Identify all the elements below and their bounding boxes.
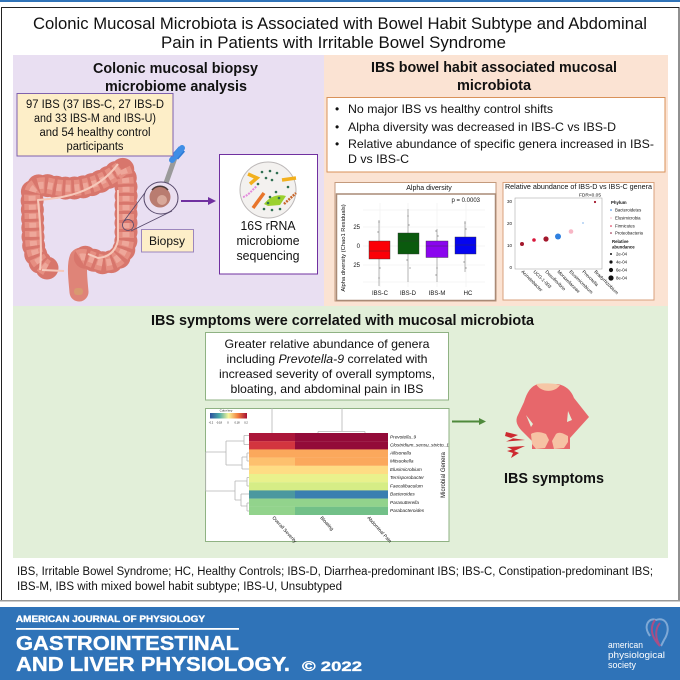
chart: alpha diversity box plot: IBS-D bbox=[400, 291, 417, 297]
chart: relative abundance scatter: 0 bbox=[509, 265, 512, 270]
text box: prevotella correlation: Greater relative abundance of genera bbox=[224, 337, 430, 351]
text box: prevotella correlation: including Prevotella-9 correlated with bbox=[226, 352, 428, 366]
heading: symptoms: IBS symptoms were correlated with mucosal microbiota bbox=[151, 313, 535, 329]
journal name: GASTROINTESTINAL bbox=[16, 633, 239, 655]
chart: alpha diversity box plot: 25 bbox=[353, 263, 361, 269]
text box: prevotella correlation: increased severity of overall symptoms, bbox=[219, 367, 435, 381]
banner: journal footer bbox=[0, 607, 680, 680]
chart: relative abundance scatter: 4e-04 bbox=[616, 260, 628, 264]
legend: colour key: -0.18 bbox=[216, 420, 223, 424]
journal name: AMERICAN JOURNAL OF PHYSIOLOGY bbox=[16, 614, 206, 625]
box: 16S rRNA sequencing bbox=[220, 154, 318, 274]
text box: bowel habit findings: D vs IBS-C bbox=[348, 152, 409, 166]
heading: bowel habit: microbiota bbox=[457, 78, 532, 94]
chart: relative abundance scatter: Bacteroidetes bbox=[615, 208, 641, 212]
chart: relative abundance scatter: Relative abundance of IBS-D vs IBS-C genera bbox=[505, 182, 653, 191]
chart: relative abundance scatter: Prevotella bbox=[581, 269, 600, 287]
chart: relative abundance scatter: 10 bbox=[507, 243, 512, 248]
legend: colour key bbox=[209, 408, 248, 424]
chart: alpha diversity box plot: IBS-M bbox=[429, 291, 445, 297]
chart: relative abundance scatter bbox=[503, 182, 654, 300]
logo: American Physiological Society: physiological bbox=[608, 650, 665, 661]
journal name: AND LIVER PHYSIOLOGY. bbox=[16, 654, 290, 676]
text box: participants: and 54 healthy control bbox=[40, 127, 150, 139]
text box: prevotella correlation: bloating, and abdominal pain in IBS bbox=[230, 382, 424, 396]
chart: genera heatmap: Overall Severity bbox=[271, 515, 298, 545]
label: biopsy bbox=[142, 230, 194, 252]
chart: relative abundance scatter: Phylum bbox=[611, 200, 627, 205]
panel: IBS symptoms correlated with mucosal microbiota bbox=[13, 306, 668, 558]
text box: bowel habit findings: Relative abundance of specific genera increased in IBS- bbox=[348, 137, 654, 151]
chart: relative abundance scatter: Relative bbox=[612, 239, 629, 244]
chart: genera heatmap: Elusimicrobium bbox=[390, 467, 422, 472]
heading: bowel habit: IBS bowel habit associated mucosal bbox=[371, 60, 617, 76]
chart: relative abundance scatter: Acinetobacter bbox=[520, 269, 544, 293]
chart: relative abundance scatter: 20 bbox=[507, 221, 512, 226]
arrow: biopsy to sequencing bbox=[181, 197, 216, 205]
heading: biopsy analysis: Colonic mucosal biopsy bbox=[93, 61, 258, 77]
legend: colour key: -0.2 bbox=[209, 420, 214, 424]
title bbox=[33, 14, 647, 52]
chart: relative abundance scatter: Elusimicrobia bbox=[615, 216, 641, 220]
journal name bbox=[16, 614, 362, 676]
chart: relative abundance scatter: Firmicutes bbox=[615, 224, 635, 228]
abbreviations footnote bbox=[17, 566, 653, 593]
title: Pain in Patients with Irritable Bowel Syndrome bbox=[161, 33, 506, 52]
chart: relative abundance scatter: 6e-04 bbox=[616, 268, 628, 272]
chart: relative abundance scatter: UCG-1-003 bbox=[532, 269, 553, 290]
label: IBS symptoms: IBS symptoms bbox=[504, 471, 604, 487]
legend: colour key: 0.2 bbox=[244, 420, 248, 424]
box: 16S rRNA sequencing: 16S rRNA bbox=[240, 219, 296, 233]
text box: bowel habit findings: • bbox=[335, 120, 339, 134]
chart: genera heatmap bbox=[206, 408, 449, 545]
chart: genera heatmap: Allisonella bbox=[389, 450, 411, 456]
journal name: © 2022 bbox=[302, 658, 362, 674]
legend: colour key: Color key bbox=[220, 408, 233, 412]
chart: relative abundance scatter: FDR<0.05 bbox=[579, 192, 601, 198]
text box: participants: participants bbox=[66, 141, 124, 153]
text box: participants: 97 IBS (37 IBS-C, 27 IBS-D bbox=[26, 99, 164, 111]
chart: relative abundance scatter: 8e-04 bbox=[616, 276, 628, 280]
chart: genera heatmap: Bloating bbox=[319, 515, 335, 532]
text box: participants bbox=[17, 94, 173, 156]
chart: alpha diversity box plot: IBS-C bbox=[372, 291, 389, 297]
box: 16S rRNA sequencing: sequencing bbox=[236, 249, 300, 263]
chart: genera heatmap: Abdominal Pain bbox=[366, 515, 393, 545]
chart: relative abundance scatter: Bradyrhizobium bbox=[593, 269, 620, 295]
abbreviations footnote: IBS, Irritable Bowel Syndrome; HC, Healthy Controls; IBS-D, Diarrhea-predominant IBS; IBS-C, Constipation-predominant IBS; bbox=[17, 566, 653, 578]
chart: genera heatmap: Parasutterella bbox=[390, 500, 419, 505]
legend: colour key: 0 bbox=[227, 420, 229, 424]
title: Colonic Mucosal Microbiota is Associated with Bowel Habit Subtype and Abdominal bbox=[33, 14, 647, 33]
icon: person with abdominal pain bbox=[505, 383, 589, 458]
legend: colour key: 0.18 bbox=[234, 420, 240, 424]
chart: relative abundance scatter: Desulfovibrio bbox=[544, 269, 567, 292]
text box: bowel habit findings: • bbox=[335, 137, 339, 151]
logo: American Physiological Society: american bbox=[608, 640, 643, 651]
chart: genera heatmap: Microbial Genera bbox=[441, 451, 447, 498]
chart: relative abundance scatter: abundance bbox=[612, 244, 635, 250]
icon: microbes bbox=[240, 162, 296, 218]
chart: genera heatmap: Faecalibaculum bbox=[390, 483, 423, 488]
chart: genera heatmap: Mitsuokella bbox=[390, 459, 414, 464]
chart: genera heatmap: Prevotella_9 bbox=[390, 434, 416, 440]
text box: bowel habit findings bbox=[327, 98, 665, 172]
icon: colon bbox=[32, 164, 126, 295]
chart: genera heatmap: Bacteroides bbox=[390, 492, 415, 497]
label: biopsy: Biopsy bbox=[149, 234, 185, 248]
logo: American Physiological Society: society bbox=[608, 660, 636, 671]
chart: genera heatmap: Parabacteroides bbox=[390, 508, 425, 513]
chart: alpha diversity box plot: Alpha diversity (Chao1 Residuals) bbox=[341, 204, 347, 292]
logo: American Physiological Society bbox=[608, 619, 668, 671]
chart: alpha diversity box plot: Alpha diversity bbox=[406, 185, 452, 192]
chart: relative abundance scatter: Moraxellaceae bbox=[556, 269, 581, 294]
text box: prevotella correlation bbox=[206, 332, 448, 400]
text box: bowel habit findings: • bbox=[335, 102, 339, 116]
heading: biopsy analysis bbox=[93, 61, 258, 95]
panel: colonic mucosal biopsy microbiome analysis bbox=[13, 55, 324, 306]
abbreviations footnote: IBS-M, IBS with mixed bowel habit subtype; IBS-U, Unsubtyped bbox=[17, 581, 342, 593]
chart: alpha diversity box plot bbox=[335, 182, 496, 301]
chart: relative abundance scatter: 30 bbox=[507, 199, 512, 204]
chart: alpha diversity box plot: 0 bbox=[357, 244, 361, 250]
text box: bowel habit findings: No major IBS vs healthy control shifts bbox=[348, 102, 553, 116]
chart: alpha diversity box plot: p = 0.0003 bbox=[451, 198, 481, 204]
icon: biopsy magnifier and forceps bbox=[122, 148, 182, 231]
box: 16S rRNA sequencing: microbiome bbox=[236, 234, 300, 248]
chart: genera heatmap: Terrisporobacter bbox=[390, 475, 424, 480]
text box: bowel habit findings: Alpha diversity was decreased in IBS-C vs IBS-D bbox=[348, 120, 616, 134]
chart: alpha diversity box plot: HC bbox=[464, 291, 473, 297]
chart: genera heatmap: Clostridium_sensu_stricto_1 bbox=[390, 442, 449, 448]
heading: bowel habit bbox=[371, 60, 617, 94]
panel: IBS bowel habit associated mucosal microbiota bbox=[324, 55, 668, 306]
text box: participants: and 33 IBS-M and IBS-U) bbox=[34, 113, 156, 125]
heading: biopsy analysis: microbiome analysis bbox=[105, 79, 247, 95]
arrow: heatmap to symptoms bbox=[452, 418, 486, 425]
chart: alpha diversity box plot: 25 bbox=[353, 225, 361, 231]
chart: relative abundance scatter: 2e-04 bbox=[616, 252, 628, 256]
chart: relative abundance scatter: Elusimicrobium bbox=[568, 269, 594, 295]
chart: relative abundance scatter: Proteobacteria bbox=[615, 230, 644, 236]
